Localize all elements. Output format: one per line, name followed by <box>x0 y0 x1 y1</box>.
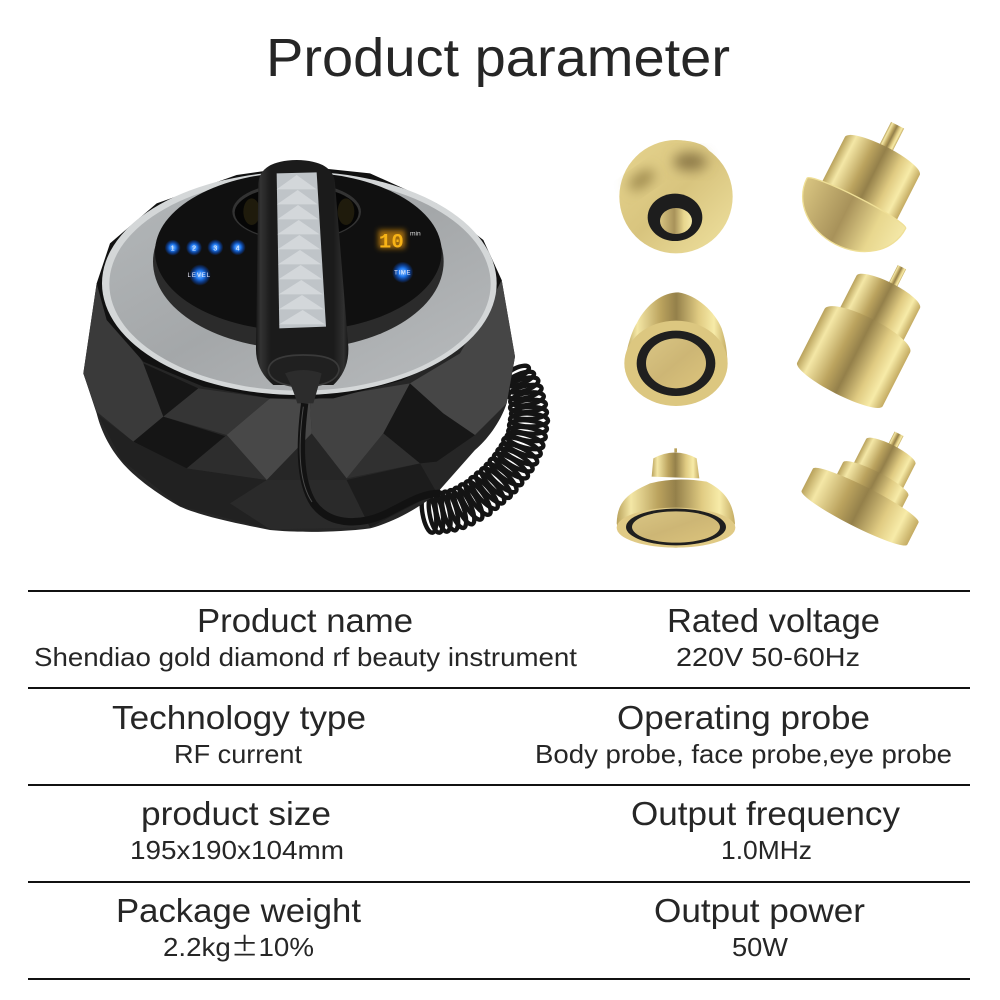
cell: operating probe: Body probe, face probe,eye probe <box>535 739 952 769</box>
level indicator lights: LEVEL <box>188 273 211 279</box>
cell: product size: product size <box>141 795 331 832</box>
level indicator lights: TIME <box>394 270 411 276</box>
cell: package weight <box>116 892 361 964</box>
cell: product name <box>34 602 578 672</box>
handpiece <box>256 160 348 403</box>
coiled power cord <box>419 363 548 534</box>
probe holder recess <box>232 183 361 241</box>
cell: technology type <box>112 699 366 769</box>
cell: product size <box>130 795 344 865</box>
timer display: min <box>410 231 421 238</box>
cell: rated voltage: Rated voltage <box>667 602 880 639</box>
cell: output frequency <box>631 795 901 865</box>
cell: operating probe: Operating probe <box>617 699 870 736</box>
cell: output power: 50W <box>732 932 788 962</box>
cell: output power <box>654 892 865 962</box>
cell: technology type: Technology type <box>112 699 366 736</box>
probe: dome cup, side view <box>786 100 946 269</box>
cell: product name: Shendiao gold diamond rf beauty instrument <box>34 642 578 672</box>
cell: package weight: 2.2kg±10% <box>163 927 314 964</box>
cell: output power: Output power <box>654 892 865 929</box>
power cable <box>300 403 440 522</box>
top rim and gray ring <box>97 166 502 398</box>
diamond-faceted base <box>83 280 515 532</box>
cell: package weight: Package weight <box>116 892 361 929</box>
level indicator lights <box>165 239 413 286</box>
black control disc <box>153 172 444 349</box>
timer display <box>378 230 421 255</box>
gold probes <box>617 100 950 552</box>
cell: output frequency: Output frequency <box>631 795 901 832</box>
cell: operating probe <box>535 699 952 769</box>
level indicator lights: 1 <box>171 243 175 252</box>
probe: flat ring, front view <box>624 292 728 406</box>
probe: dome with ring, front view <box>619 140 733 253</box>
level indicator lights: 2 <box>192 243 196 252</box>
cell: technology type: RF current <box>174 739 303 769</box>
timer display: 10 <box>379 232 404 255</box>
product device illustration <box>83 160 548 534</box>
title: Product parameter <box>266 28 730 88</box>
cell: product size: 195x190x104mm <box>130 835 344 865</box>
level indicator lights: 3 <box>213 243 217 252</box>
probe: stepped cylinder, side view <box>793 244 943 415</box>
cell: rated voltage <box>667 602 880 672</box>
cell: output frequency: 1.0MHz <box>721 835 812 865</box>
cell: rated voltage: 220V 50-60Hz <box>676 642 860 672</box>
level indicator lights: 4 <box>236 243 240 252</box>
table rules <box>28 590 970 980</box>
probe: triple-stepped disc, side view <box>798 406 950 552</box>
probe: wide disc, low view <box>617 448 735 548</box>
parameter table <box>28 590 970 980</box>
cell: product name: Product name <box>197 602 413 639</box>
